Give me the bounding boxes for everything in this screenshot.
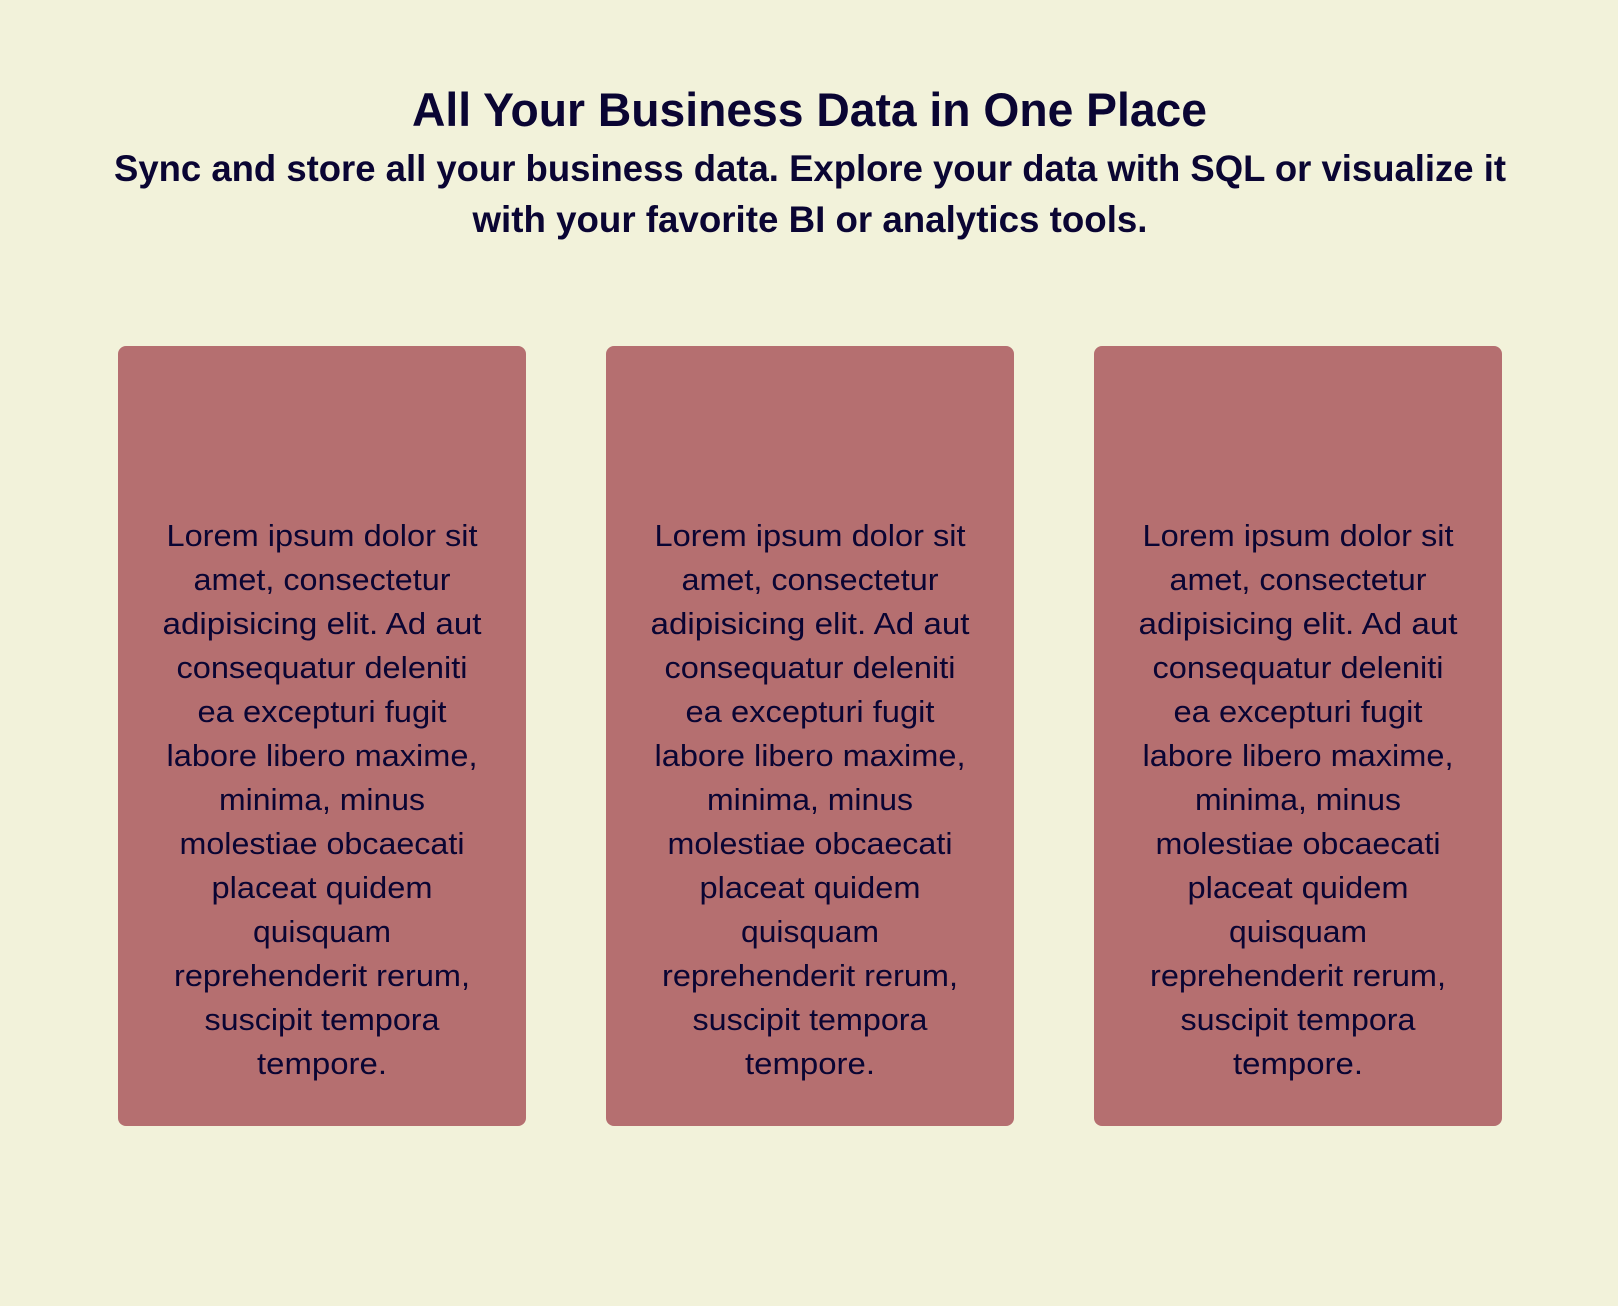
right card text	[1138, 518, 1458, 1081]
middle card text: adipisicing elit. Ad aut	[650, 606, 970, 641]
panel: left card	[118, 346, 526, 1126]
panel: middle card	[606, 346, 1014, 1126]
left card text: molestiae obcaecati	[180, 826, 464, 861]
right card text: adipisicing elit. Ad aut	[1138, 606, 1458, 641]
middle card text: reprehenderit rerum,	[662, 958, 958, 993]
middle card text: molestiae obcaecati	[668, 826, 952, 861]
middle card text: quisquam	[741, 914, 879, 949]
left card text: amet, consectetur	[194, 562, 450, 597]
right card text: reprehenderit rerum,	[1150, 958, 1446, 993]
middle card text: tempore.	[745, 1046, 875, 1081]
left card text	[162, 518, 482, 1081]
left card text: consequatur deleniti	[176, 650, 468, 685]
middle card text: labore libero maxime,	[654, 738, 966, 773]
left card text: adipisicing elit. Ad aut	[162, 606, 482, 641]
right card text: molestiae obcaecati	[1156, 826, 1440, 861]
left card text: quisquam	[253, 914, 391, 949]
left card text: reprehenderit rerum,	[174, 958, 470, 993]
left card text: ea excepturi fugit	[198, 694, 447, 729]
middle card text: Lorem ipsum dolor sit	[654, 518, 966, 553]
right card text: placeat quidem	[1188, 870, 1408, 905]
left card text: placeat quidem	[212, 870, 432, 905]
left card text: Lorem ipsum dolor sit	[166, 518, 478, 553]
subtitle: Sync and store all your business data. Explore your data with SQL or visualize it	[114, 148, 1506, 189]
right card text: quisquam	[1229, 914, 1367, 949]
right card text: amet, consectetur	[1170, 562, 1426, 597]
right card text: labore libero maxime,	[1142, 738, 1454, 773]
middle card text: consequatur deleniti	[664, 650, 956, 685]
subtitle	[114, 148, 1506, 240]
right card text: suscipit tempora	[1180, 1002, 1416, 1037]
middle card text	[650, 518, 970, 1081]
right card text: Lorem ipsum dolor sit	[1142, 518, 1454, 553]
middle card text: suscipit tempora	[692, 1002, 928, 1037]
title: All Your Business Data in One Place	[412, 83, 1207, 136]
left card text: minima, minus	[219, 782, 425, 817]
left card text: tempore.	[257, 1046, 387, 1081]
right card text: tempore.	[1233, 1046, 1363, 1081]
right card text: minima, minus	[1195, 782, 1401, 817]
right card text: ea excepturi fugit	[1174, 694, 1423, 729]
middle card text: ea excepturi fugit	[686, 694, 935, 729]
left card text: labore libero maxime,	[166, 738, 478, 773]
right card text: consequatur deleniti	[1152, 650, 1444, 685]
middle card text: amet, consectetur	[682, 562, 938, 597]
left card text: suscipit tempora	[204, 1002, 440, 1037]
panel: right card	[1094, 346, 1502, 1126]
subtitle: with your favorite BI or analytics tools.	[472, 199, 1148, 240]
middle card text: minima, minus	[707, 782, 913, 817]
middle card text: placeat quidem	[700, 870, 920, 905]
